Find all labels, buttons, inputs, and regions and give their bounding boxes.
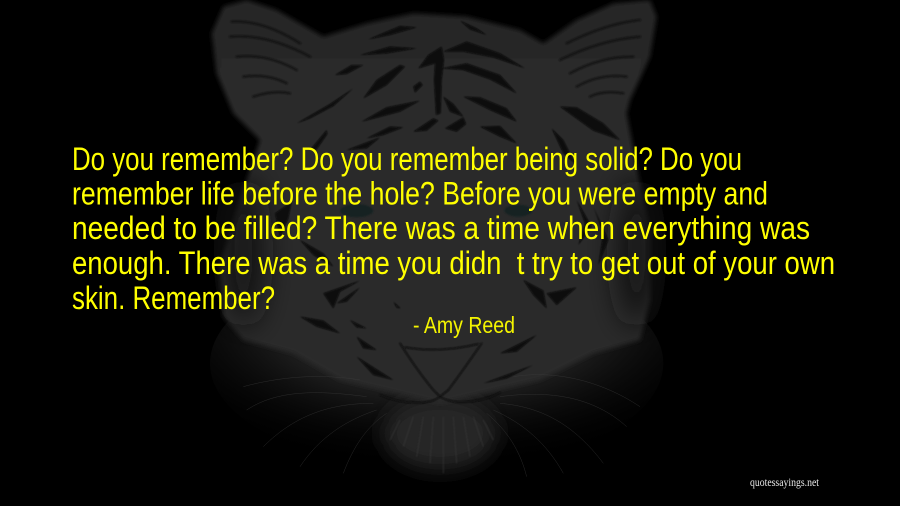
quote text xyxy=(72,141,835,316)
whiskers xyxy=(243,375,640,477)
chin xyxy=(383,397,497,470)
tiger face illustration xyxy=(210,0,663,477)
eyes xyxy=(340,204,532,217)
quote text: needed to be filled? There was a time when everything was xyxy=(72,210,810,246)
head silhouette xyxy=(212,0,657,403)
quote text: remember life before the hole? Before you were empty and xyxy=(72,176,768,212)
quote text: skin. Remember? xyxy=(72,280,275,316)
watermark: quotessayings.net xyxy=(750,475,820,489)
ear fur xyxy=(230,20,640,97)
attribution: - Amy Reed xyxy=(413,312,515,338)
forehead and cheek stripes xyxy=(275,21,620,383)
chin fur xyxy=(390,417,493,473)
quote text: Do you remember? Do you remember being solid? Do you xyxy=(72,141,742,177)
side face shading xyxy=(223,180,657,327)
lower face glow xyxy=(210,257,663,470)
nose and mouth lines xyxy=(380,343,500,403)
